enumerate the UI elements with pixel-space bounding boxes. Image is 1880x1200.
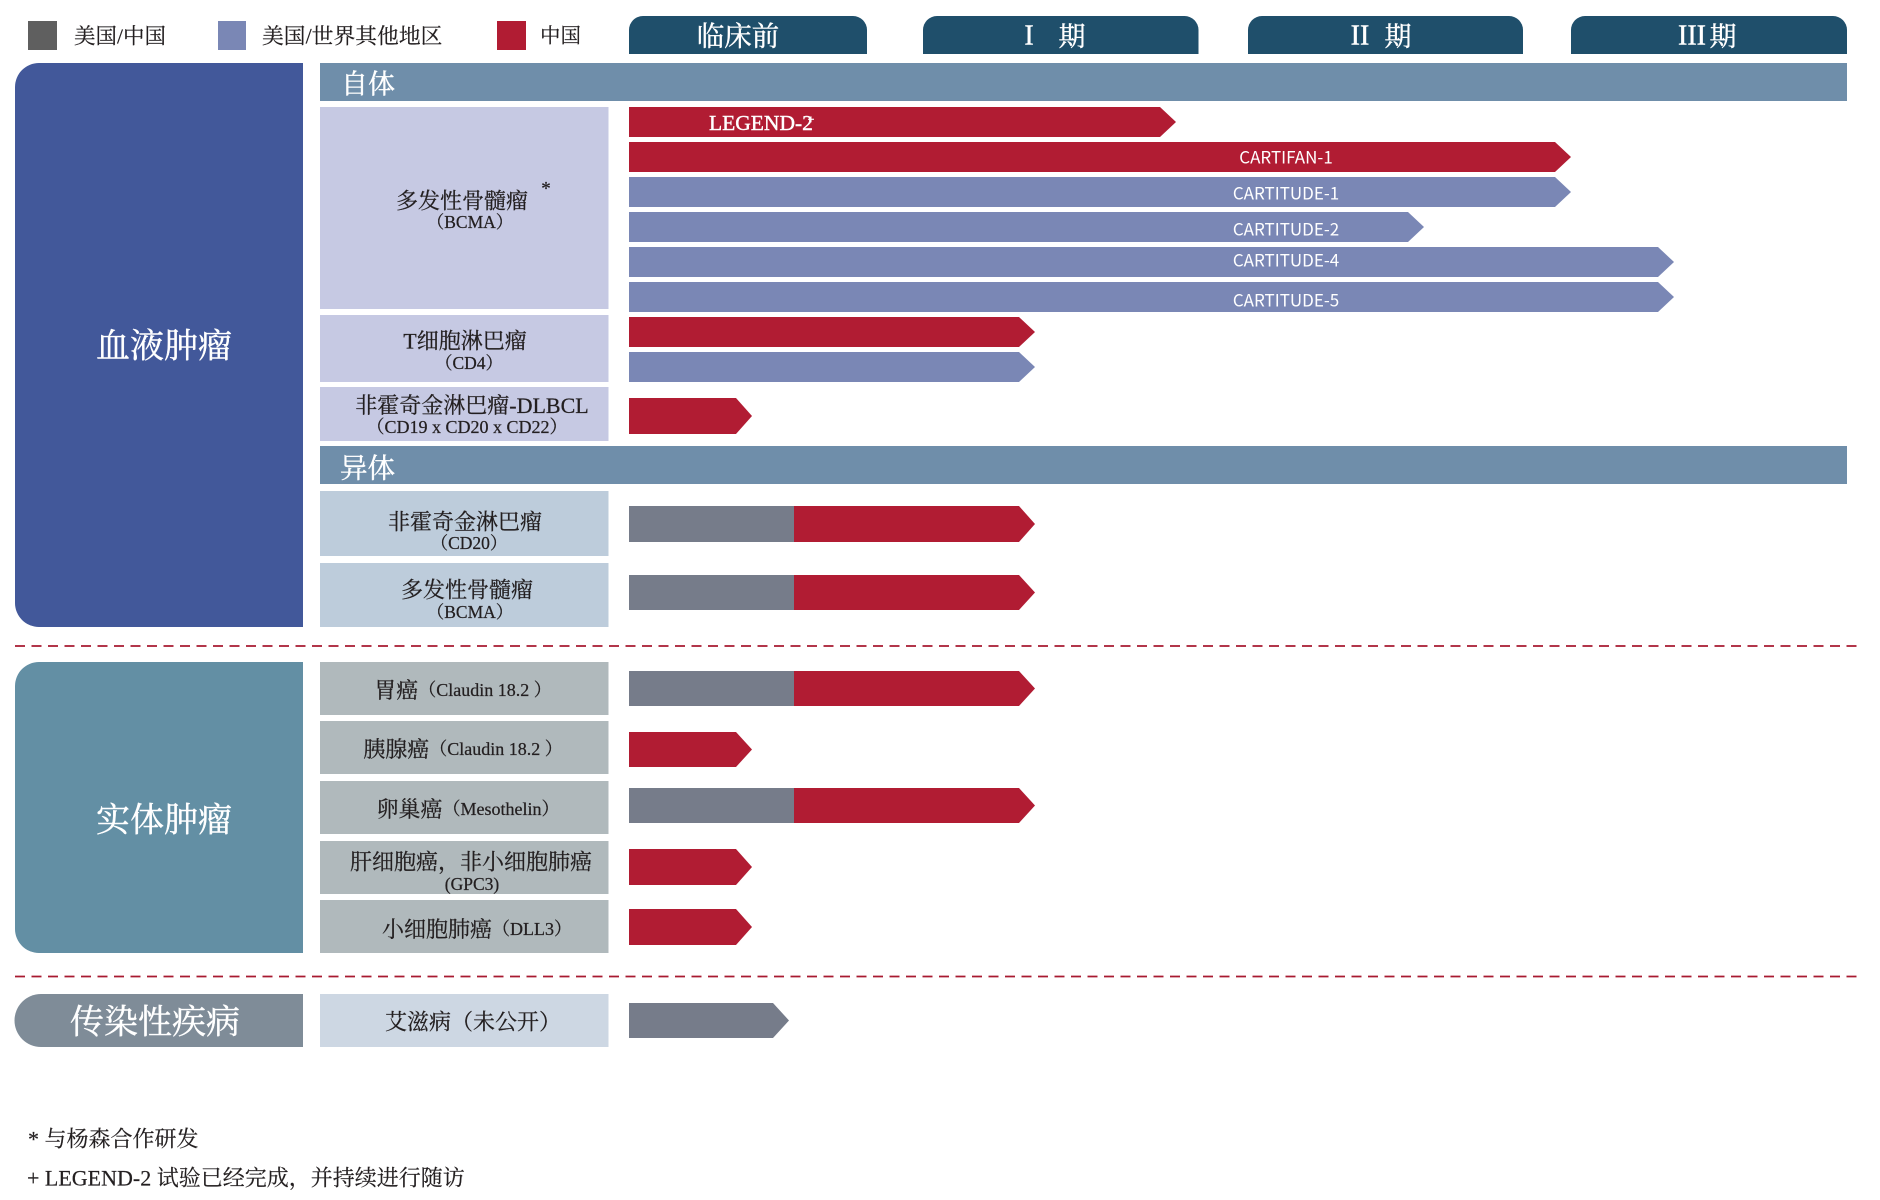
cell: ovarian: 卵巢癌（Mesothelin） (376, 796, 560, 822)
cell: MM BCMA allogeneic: （BCMA） (427, 602, 513, 622)
bar: CARTITUDE-2 (629, 212, 1424, 242)
panel: hematologic tumors: 血液肿瘤 (96, 328, 232, 366)
bar: SCLC (629, 909, 752, 945)
bar: pancreatic (629, 732, 752, 767)
cell: MM BCMA allogeneic: 多发性骨髓瘤 (401, 578, 533, 602)
bar: T-cell lymphoma US (629, 352, 1035, 382)
bar: CARTITUDE-5: CARTITUDE-5 (1233, 286, 1339, 312)
cell: pancreatic: 胰腺癌（Claudin 18.2 ） (363, 736, 563, 762)
panel: hematologic tumors (15, 63, 303, 627)
bar: CARTITUDE-2: CARTITUDE-2 (1233, 216, 1339, 240)
cell: NHL DLBCL: 非霍奇金淋巴瘤-DLBCL (355, 393, 589, 418)
bar: CARTIFAN-1 (629, 142, 1571, 172)
cell: multiple myeloma BCMA (320, 107, 608, 309)
bar: HIV (629, 1003, 789, 1038)
cell: NHL DLBCL: （CD19 x CD20 x CD22） (366, 417, 568, 437)
cell: gastric (320, 662, 608, 715)
phase headers: II (1351, 20, 1369, 52)
phase headers: 期 (1710, 22, 1736, 52)
heading: autologous (320, 63, 1847, 101)
bar: DLBCL (629, 398, 752, 434)
cell: ovarian (320, 781, 608, 834)
bar: LEGEND-2: LEGEND-2 (709, 111, 813, 135)
cell: liver and NSCLC: 肝细胞癌，非小细胞肺癌 (350, 850, 592, 876)
panel: solid tumors: 实体肿瘤 (96, 802, 232, 840)
cell: HIV: 艾滋病（未公开） (385, 1010, 561, 1034)
cell: multiple myeloma BCMA: * (541, 178, 551, 200)
bar: liver and NSCLC (629, 849, 752, 885)
bar: CARTITUDE-4: CARTITUDE-4 (1233, 246, 1339, 272)
cell: HIV (320, 994, 608, 1047)
cell: T-cell lymphoma (320, 315, 608, 382)
bar: LEGEND-2: + (808, 112, 815, 126)
panel: solid tumors (15, 662, 303, 953)
bar: NHL CD20 (629, 506, 1035, 542)
phase headers: 期 (1384, 22, 1412, 52)
cell: NHL DLBCL (320, 387, 608, 441)
heading: allogeneic: 异体 (340, 452, 395, 484)
heading: allogeneic (320, 446, 1847, 484)
bar: T-cell lymphoma China (629, 317, 1035, 347)
cell: SCLC: 小细胞肺癌（DLL3） (382, 916, 572, 942)
phase headers: 临床前 (697, 20, 779, 52)
phase headers: III (1678, 20, 1706, 52)
cell: T-cell lymphoma: T细胞淋巴瘤 (403, 328, 527, 354)
bar: CARTITUDE-5 (629, 282, 1674, 312)
bar: CARTITUDE-4 (629, 246, 1674, 277)
cell: T-cell lymphoma: （CD4） (435, 353, 503, 373)
bar: LEGEND-2 (629, 107, 1176, 137)
legend: 美国/中国 (74, 24, 166, 48)
cell: pancreatic (320, 721, 608, 774)
footnote: Janssen: * 与杨森合作研发 (28, 1126, 199, 1152)
heading: autologous: 自体 (341, 70, 395, 100)
bar: gastric (629, 671, 1035, 706)
legend (28, 21, 581, 50)
cell: gastric: 胃癌（Claudin 18.2 ） (374, 678, 552, 702)
bar: ovarian (629, 788, 1035, 823)
phase headers: 期 (1058, 22, 1086, 52)
footnote: LEGEND-2: + LEGEND-2 试验已经完成，并持续进行随访 (27, 1166, 465, 1192)
panel: infectious disease (14, 994, 303, 1047)
cell: NHL CD20 (320, 491, 608, 556)
legend: 中国 (540, 24, 581, 48)
cell: MM BCMA allogeneic (320, 563, 608, 627)
cell: NHL CD20: （CD20） (431, 533, 507, 553)
panel: infectious disease: 传染性疾病 (70, 1004, 240, 1042)
phase headers (629, 16, 1847, 54)
cell: liver and NSCLC (320, 841, 608, 894)
phase headers: I (1024, 20, 1034, 52)
cell: liver and NSCLC: (GPC3) (445, 874, 499, 894)
cell: multiple myeloma BCMA: 多发性骨髓瘤 (396, 188, 528, 214)
cell: multiple myeloma BCMA: （BCMA） (427, 212, 513, 232)
bar: CARTITUDE-1 (629, 177, 1571, 207)
bar: CARTIFAN-1: CARTIFAN-1 (1239, 144, 1333, 168)
cell: SCLC (320, 900, 608, 953)
cell: NHL CD20: 非霍奇金淋巴瘤 (388, 510, 542, 534)
legend: 美国/世界其他地区 (262, 24, 442, 48)
bar: MM BCMA allogeneic (629, 575, 1035, 610)
bar: CARTITUDE-1: CARTITUDE-1 (1233, 180, 1339, 204)
